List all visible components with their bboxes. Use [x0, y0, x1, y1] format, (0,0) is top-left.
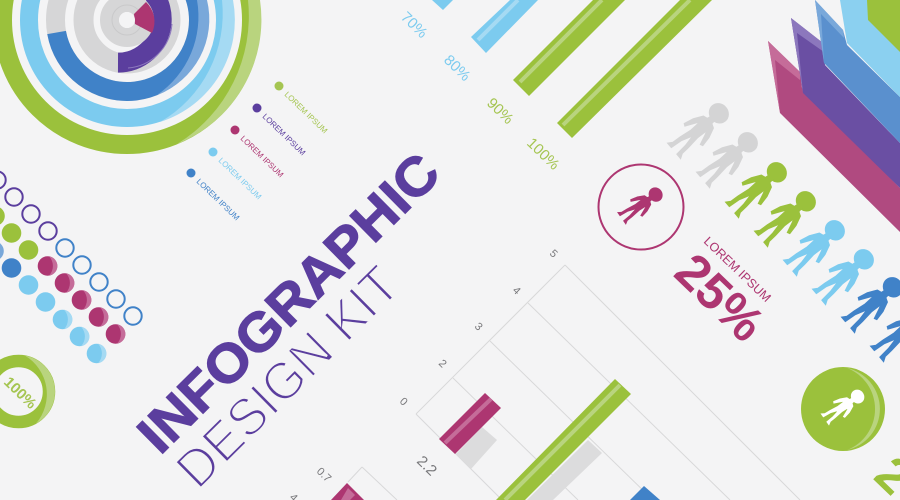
layered ribbons	[768, 0, 900, 232]
legend: LOREM IPSUM	[217, 156, 263, 202]
legend	[186, 82, 329, 223]
bar chart: 0	[397, 396, 410, 408]
title: INFOGRAPHIC	[126, 142, 451, 465]
percent bars: 80%	[440, 52, 474, 85]
bar chart: 3	[472, 321, 485, 333]
dot matrix	[0, 171, 142, 363]
legend: LOREM IPSUM	[195, 177, 241, 223]
people pictogram row	[665, 97, 900, 365]
radial chart	[2, 0, 261, 144]
bar chart: 5	[547, 248, 560, 260]
legend: LOREM IPSUM	[283, 90, 329, 136]
title: DESIGN KIT	[165, 255, 411, 500]
percent bars	[397, 0, 712, 174]
second bar chart	[287, 466, 397, 500]
bar chart: 4	[510, 285, 523, 297]
stat: 25%: 25%	[664, 243, 775, 352]
progress ring: 100%	[0, 356, 55, 424]
magenta person badge	[598, 164, 684, 250]
progress ring: 100%: 100%	[0, 374, 40, 413]
stat: 25%: LOREM IPSUM	[701, 234, 774, 305]
percent bars: 70%	[397, 9, 431, 42]
legend: LOREM IPSUM	[239, 134, 285, 180]
percent bars: 90%	[483, 95, 517, 128]
bar chart: 2	[436, 358, 449, 370]
green person button	[801, 367, 885, 451]
percent bars: 100%	[523, 135, 563, 174]
second bar chart: 0.7	[314, 466, 333, 485]
bar chart: 2.2	[413, 453, 440, 479]
bar chart	[397, 248, 800, 500]
legend: LOREM IPSUM	[261, 112, 307, 158]
